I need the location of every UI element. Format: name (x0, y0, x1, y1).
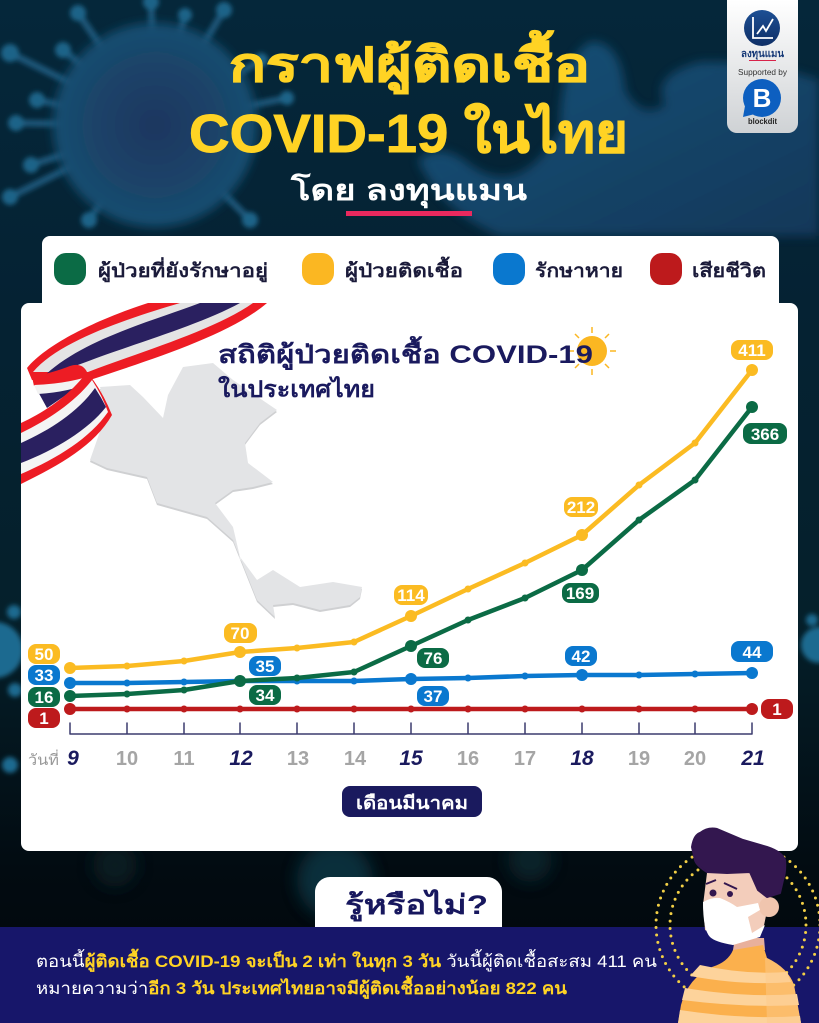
data labels: 33 (35, 666, 53, 685)
data labels: 76 (424, 649, 442, 668)
data labels: 411 (738, 341, 766, 360)
icon: Blockdit logo: B (753, 83, 771, 113)
data labels: 114 (397, 586, 425, 605)
axis (70, 723, 752, 734)
x axis labels: วันที่ (28, 749, 59, 769)
data labels: 50 (35, 645, 53, 664)
series: recovered (64, 667, 758, 689)
x axis labels: 20 (684, 748, 706, 770)
series: active (64, 401, 758, 702)
data labels: 1 (772, 700, 782, 719)
title: กราฟผู้ติดเชื้อ (229, 30, 590, 95)
x axis labels: 18 (570, 747, 594, 770)
data labels: 42 (572, 647, 590, 666)
logo plate (727, 0, 798, 133)
supported by: Supported by (738, 68, 787, 77)
x axis labels (28, 747, 765, 770)
legend: active patients (54, 253, 268, 285)
data labels: 34 (256, 686, 275, 705)
x axis labels: 13 (287, 748, 309, 770)
data labels: 212 (567, 498, 595, 517)
legend: recovered: รักษาหาย (535, 261, 623, 282)
line chart (64, 364, 758, 734)
data labels: 16 (35, 688, 53, 707)
series: confirmed (64, 364, 758, 674)
banner text (36, 948, 657, 1000)
illustration: man with face mask (656, 828, 819, 1023)
chart panel (21, 303, 798, 851)
x axis labels: 12 (229, 747, 253, 770)
chart title: ในประเทศไทย (218, 375, 375, 402)
x axis labels: 19 (628, 748, 650, 770)
x axis labels: 9 (67, 747, 79, 770)
icon: Longtunman logo (744, 10, 780, 46)
banner text: ตอนนี้ผู้ติดเชื้อ COVID-19 จะเป็น 2 เท่า ในทุก 3 วัน วันนี้ผู้ติดเชื้อสะสม 411 คน (36, 948, 657, 973)
x axis labels: 10 (116, 748, 138, 770)
title: COVID-19 ในไทย (189, 102, 628, 164)
Thai flag ribbon (21, 303, 267, 484)
data labels (28, 340, 793, 728)
x axis labels: 16 (457, 748, 479, 770)
data labels: 366 (751, 425, 779, 444)
x axis labels: 14 (344, 748, 367, 770)
legend: deaths (650, 253, 766, 285)
banner text: หมายความว่า อีก 3 วัน ประเทศไทยอาจมีผู้ติดเชื้ออย่างน้อย 822 คน (36, 975, 567, 1000)
x axis labels: 15 (399, 747, 423, 770)
x axis labels: 11 (173, 748, 195, 770)
legend: deaths: เสียชีวิต (692, 260, 766, 282)
legend: confirmed: ผู้ป่วยติดเชื้อ (345, 256, 463, 283)
legend: recovered (493, 253, 623, 285)
x axis labels: 21 (740, 747, 765, 770)
month label: เดือนมีนาคม (356, 793, 468, 813)
legend: active patients: ผู้ป่วยที่ยังรักษาอยู่ (98, 257, 268, 283)
subtitle: by Longtunman (290, 172, 527, 216)
x axis labels: 17 (514, 748, 536, 770)
title (189, 30, 628, 164)
data labels: 70 (231, 624, 249, 643)
data labels: 1 (39, 709, 49, 728)
icon: sun (568, 327, 616, 375)
data labels: 169 (566, 584, 594, 603)
subtitle: by Longtunman: โดย ลงทุนแมน (290, 172, 527, 208)
legend: confirmed (302, 253, 463, 285)
Blockdit name: blockdit (748, 117, 777, 126)
bottom banner (0, 877, 819, 1023)
chart title (218, 335, 593, 402)
month label (342, 786, 482, 817)
data labels: 35 (256, 657, 274, 676)
data labels: 44 (743, 643, 762, 662)
chart title: สถิติผู้ป่วยติดเชื้อ COVID-19 (218, 335, 593, 371)
did you know tab (315, 877, 502, 927)
legend bar (42, 236, 779, 310)
map of Thailand (90, 363, 362, 619)
logo name: ลงทุนแมน (741, 49, 784, 60)
series: deaths (64, 703, 758, 715)
data labels: 37 (424, 687, 442, 706)
did you know tab: รู้หรือไม่? (345, 889, 488, 922)
